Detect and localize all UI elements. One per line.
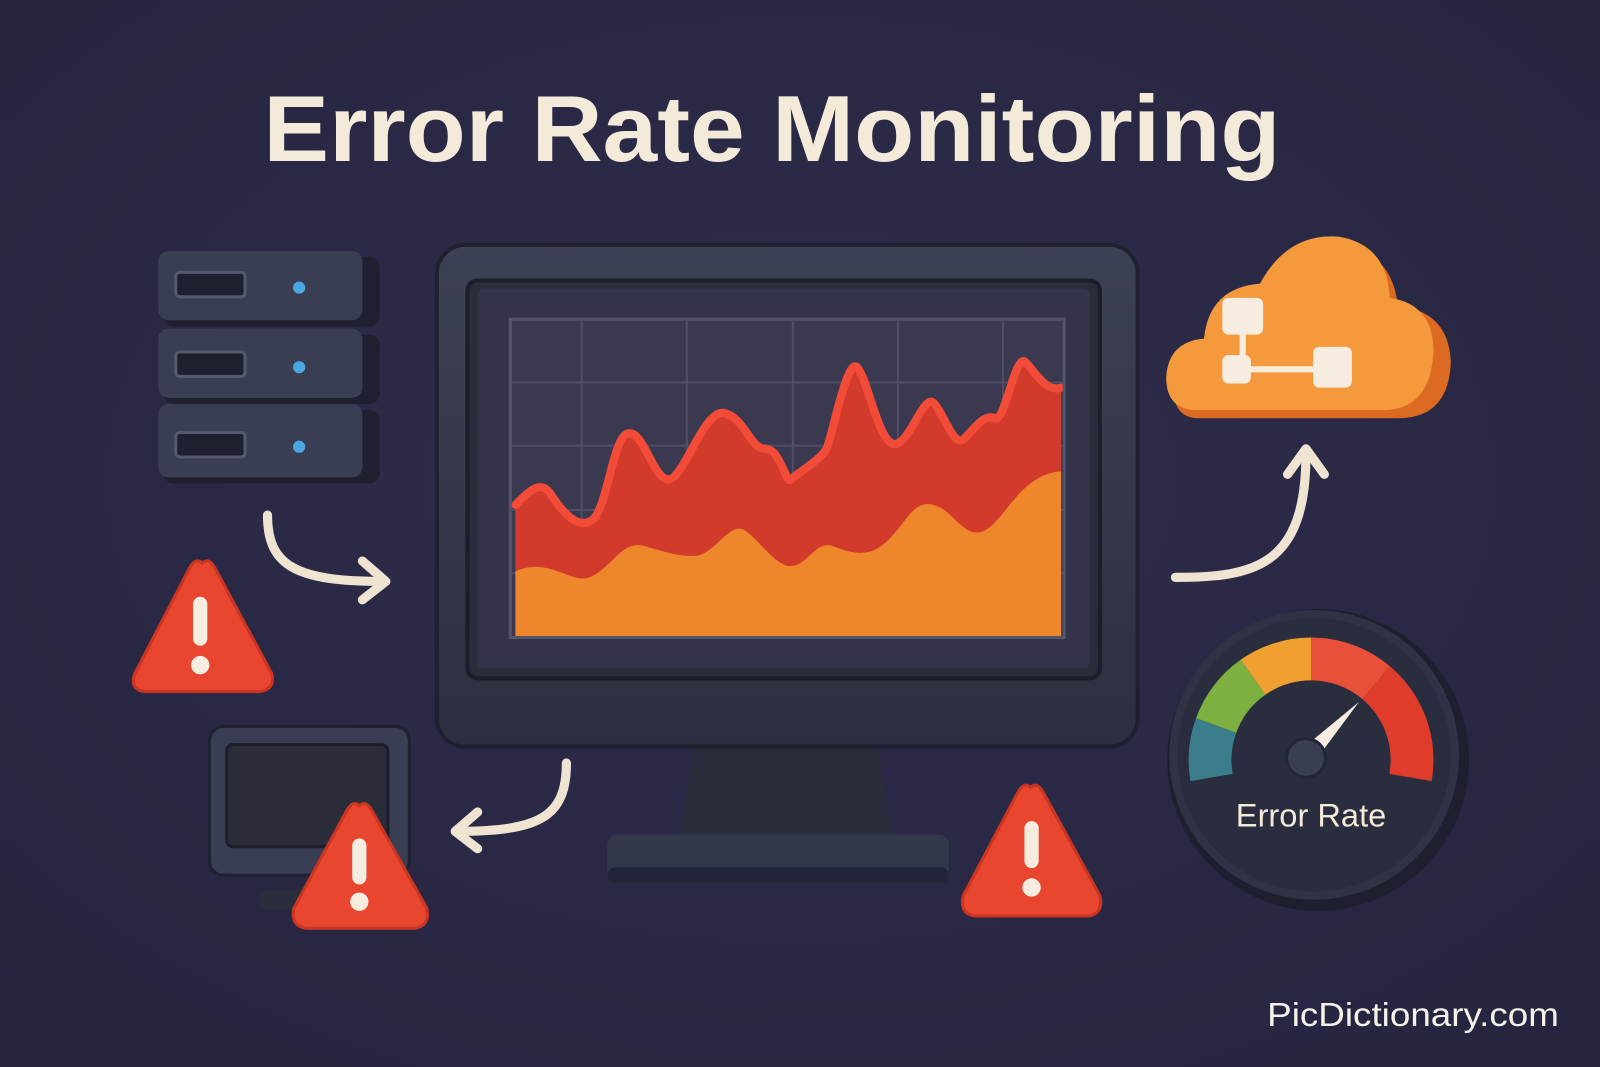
icon: warning bottom-center — [962, 785, 1101, 916]
icon: warning bottom-left — [293, 804, 427, 928]
icon: server stack — [158, 251, 380, 484]
gauge needle — [1287, 702, 1359, 777]
gauge label: Error Rate — [1236, 796, 1386, 833]
icon: cloud — [1166, 236, 1451, 418]
icon: network nodes — [1222, 298, 1352, 388]
icon: small monitor — [209, 726, 409, 910]
chart — [510, 319, 1064, 638]
arrow: server to monitor — [268, 515, 386, 600]
title: Error Rate Monitoring — [263, 76, 1280, 181]
monitor — [437, 245, 1138, 883]
arrow: monitor to client — [455, 763, 566, 849]
monitor stand — [607, 743, 949, 883]
icon: warning left — [133, 561, 272, 692]
gauge — [1167, 609, 1469, 911]
arrow: monitor to cloud — [1175, 449, 1324, 577]
watermark: PicDictionary.com — [1267, 997, 1559, 1034]
